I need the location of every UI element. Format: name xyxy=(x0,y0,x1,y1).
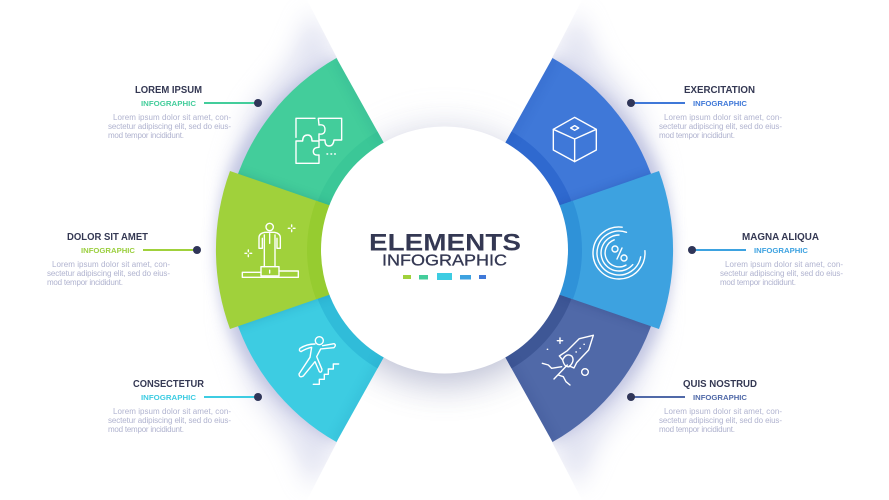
icon: cube xyxy=(553,117,596,162)
panel: consectetur segment xyxy=(238,294,384,442)
panel: exercitation segment xyxy=(505,58,651,206)
callout: lorem ipsum: mod tempor incididunt. xyxy=(108,131,184,140)
callout: consectetur: CONSECTETUR xyxy=(133,379,205,390)
colour key xyxy=(403,273,486,280)
panel: lorem ipsum segment xyxy=(238,58,384,206)
callout: dolor sit amet: Lorem ipsum dolor sit amet, con- xyxy=(52,260,170,269)
callout: lorem ipsum: LOREM IPSUM xyxy=(135,85,202,96)
callout: exercitation: mod tempor incididunt. xyxy=(659,131,735,140)
callout: magna aliqua: INFOGRAPHIC xyxy=(754,246,809,255)
callout: dolor sit amet: DOLOR SIT AMET xyxy=(67,232,148,243)
callout: quis nostrud: QUIS NOSTRUD xyxy=(683,379,757,390)
callout: lorem ipsum: INFOGRAPHIC xyxy=(141,99,197,108)
callout: quis nostrud xyxy=(627,379,782,434)
callout: exercitation xyxy=(627,85,782,140)
callout: dolor sit amet xyxy=(47,232,201,287)
icon: person on podium xyxy=(242,223,298,277)
icon: rocket xyxy=(542,335,593,385)
callout: consectetur: mod tempor incididunt. xyxy=(108,425,184,434)
callout: exercitation: Lorem ipsum dolor sit amet, con- xyxy=(664,113,782,122)
callout: quis nostrud: mod tempor incididunt. xyxy=(659,425,735,434)
background shadows xyxy=(216,10,673,490)
callout: quis nostrud: Lorem ipsum dolor sit amet, con- xyxy=(664,407,782,416)
title: elements: ELEMENTS xyxy=(369,230,521,256)
callout: lorem ipsum: Lorem ipsum dolor sit amet, con- xyxy=(113,113,231,122)
callout: exercitation: INFOGRAPHIC xyxy=(693,99,748,108)
callout: magna aliqua: MAGNA ALIQUA xyxy=(742,232,819,243)
callout: magna aliqua xyxy=(688,232,843,287)
icon: running up stairs xyxy=(299,337,339,384)
callout: dolor sit amet: sectetur adipiscing elit, sed do eius- xyxy=(47,269,170,278)
center circle xyxy=(321,126,568,374)
callout: dolor sit amet: INFOGRAPHIC xyxy=(81,246,136,255)
callout: lorem ipsum: sectetur adipiscing elit, sed do eius- xyxy=(108,122,231,131)
panel: quis nostrud segment xyxy=(505,294,651,442)
callout: exercitation: sectetur adipiscing elit, sed do eius- xyxy=(659,122,782,131)
callout: consectetur xyxy=(108,379,262,434)
callout: quis nostrud: INFOGRAPHIC xyxy=(693,393,748,402)
callout: consectetur: Lorem ipsum dolor sit amet, con- xyxy=(113,407,231,416)
callout: magna aliqua: sectetur adipiscing elit, sed do eius- xyxy=(720,269,843,278)
icon: puzzle xyxy=(296,118,342,163)
callout: magna aliqua: Lorem ipsum dolor sit amet, con- xyxy=(725,260,843,269)
icon: percent disc xyxy=(593,227,645,279)
callout: quis nostrud: sectetur adipiscing elit, sed do eius- xyxy=(659,416,782,425)
subtitle: infographic: INFOGRAPHIC xyxy=(382,252,507,270)
callout: consectetur: sectetur adipiscing elit, sed do eius- xyxy=(108,416,231,425)
panel: magna aliqua segment xyxy=(560,171,674,329)
panel: dolor sit amet segment xyxy=(216,171,330,329)
callout: exercitation: EXERCITATION xyxy=(684,85,755,96)
callout: lorem ipsum xyxy=(108,85,262,140)
callout: consectetur: INFOGRAPHIC xyxy=(141,393,197,402)
callout: magna aliqua: mod tempor incididunt. xyxy=(720,278,796,287)
callout: dolor sit amet: mod tempor incididunt. xyxy=(47,278,123,287)
